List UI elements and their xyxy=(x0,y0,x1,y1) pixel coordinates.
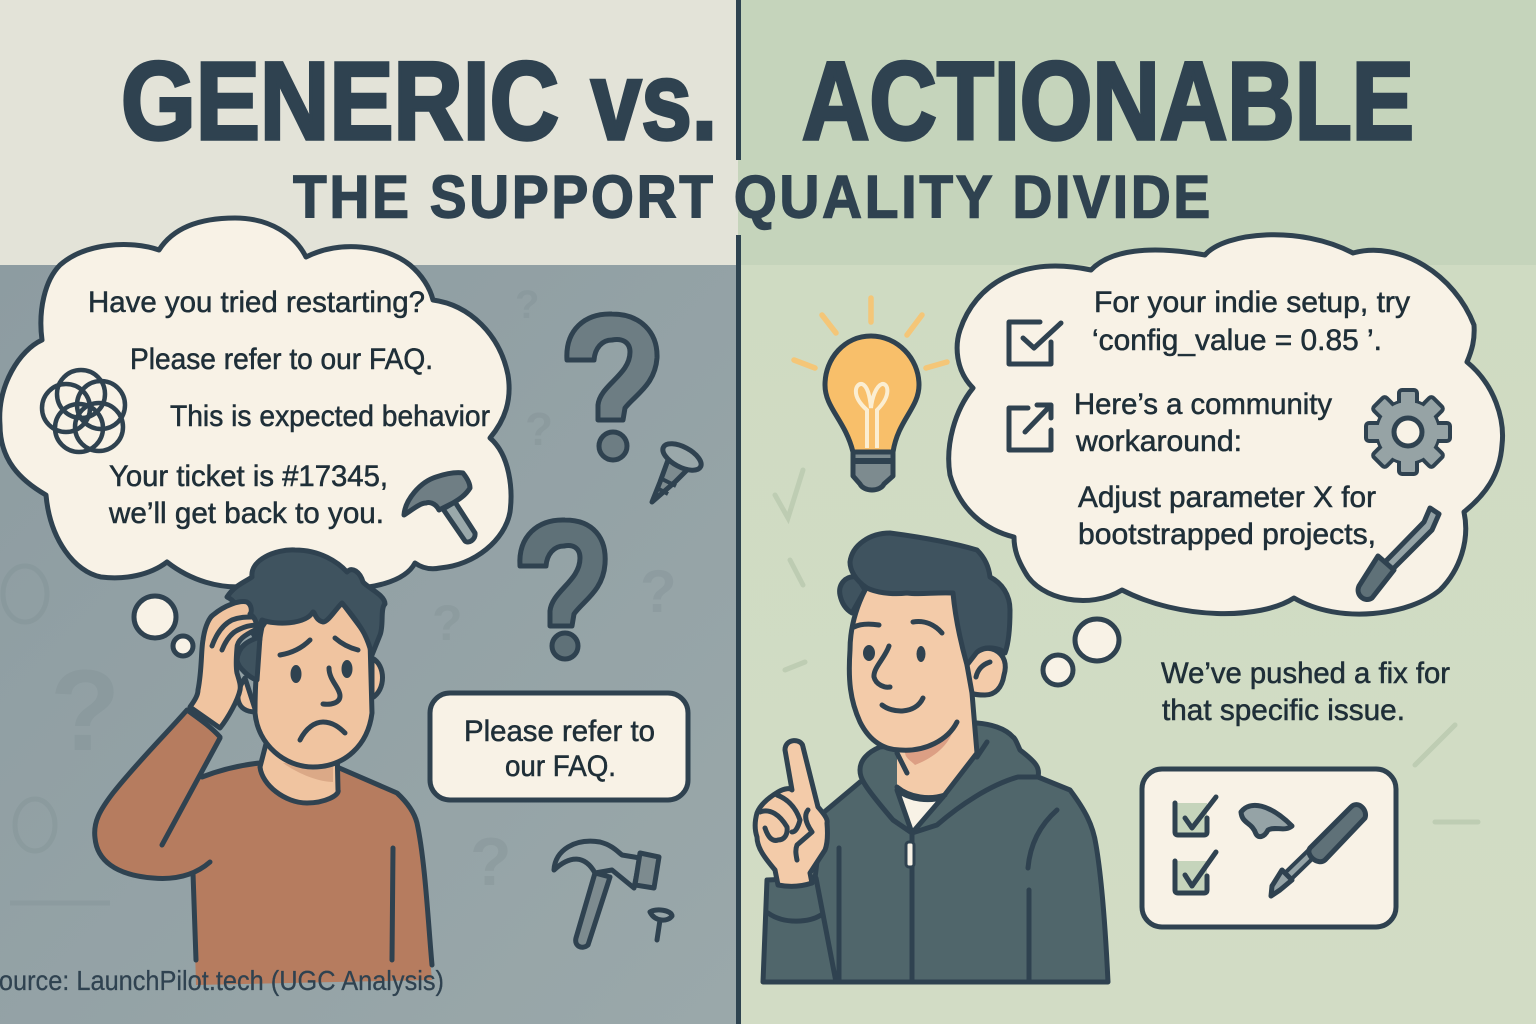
faint background marks: actionable side xyxy=(775,470,1478,822)
left thought text: Please refer to our FAQ. xyxy=(130,343,433,376)
nose xyxy=(323,668,340,704)
ear xyxy=(967,648,1005,695)
icon: tangled knot xyxy=(42,370,125,452)
hand xyxy=(190,602,256,728)
base xyxy=(853,452,893,490)
speech box: FAQ xyxy=(430,693,688,800)
faint background marks: generic side: ? xyxy=(515,283,539,327)
left thought text: Your ticket is #17345, xyxy=(109,460,388,493)
left thought text: we’ll get back to you. xyxy=(108,497,384,530)
small thought bubbles left xyxy=(134,596,193,656)
right thought text: bootstrapped projects, xyxy=(1078,518,1376,551)
glass xyxy=(825,336,919,452)
icon: large question mark 1 xyxy=(567,314,657,460)
finger lines xyxy=(212,617,258,650)
fix statement text xyxy=(1161,657,1450,727)
eyes xyxy=(290,660,352,683)
shirt xyxy=(897,790,943,833)
neck and collar lines xyxy=(768,693,1057,982)
right thought text: For your indie setup, try xyxy=(1094,286,1410,319)
faint background marks: generic side: ? xyxy=(640,558,677,625)
fix statement text: that specific issue. xyxy=(1162,694,1405,727)
icon: screw xyxy=(652,438,705,502)
right thought text: workaround: xyxy=(1075,425,1242,458)
small thought bubbles right xyxy=(1043,619,1119,685)
side hair xyxy=(840,577,865,613)
neck xyxy=(260,740,338,803)
faint background marks: generic side: ? xyxy=(50,647,120,775)
title: GENERIC xyxy=(121,40,559,163)
faint background marks: generic side: ? xyxy=(432,595,463,651)
icon: screwdriver in bubble xyxy=(1358,508,1439,600)
left thought cloud xyxy=(0,218,511,588)
icon: checkbox xyxy=(1009,322,1061,364)
right thought text: Here’s a community xyxy=(1074,388,1332,421)
panel: header right background xyxy=(738,0,1536,265)
side hair patch xyxy=(237,637,260,680)
screwdriver xyxy=(1271,805,1366,896)
neck shadow xyxy=(283,763,333,782)
icon: bubble hammer xyxy=(404,473,475,542)
icon: large question mark 2 xyxy=(520,520,605,659)
hoodie body xyxy=(763,767,1108,982)
panel: header left background xyxy=(0,0,738,265)
part blob xyxy=(1241,805,1292,837)
checklist box xyxy=(1142,769,1396,927)
zipper xyxy=(906,842,914,867)
left thought text: This is expected behavior xyxy=(170,400,490,433)
nose xyxy=(874,646,890,687)
smile xyxy=(882,698,923,711)
title: ACTIONABLE xyxy=(802,40,1414,163)
confused man xyxy=(95,550,432,985)
face xyxy=(255,600,372,767)
helpful man xyxy=(755,533,1108,982)
rays xyxy=(794,298,947,368)
frown xyxy=(300,722,345,740)
icon: external link xyxy=(1009,405,1051,450)
faint background marks: generic side: ? xyxy=(470,824,512,900)
panel: actionable side background xyxy=(738,265,1536,1024)
checkbox 2 xyxy=(1175,852,1216,893)
icon: hammer and nail xyxy=(554,841,672,947)
sweater with arm xyxy=(95,710,432,985)
left ear xyxy=(238,678,256,712)
hood xyxy=(860,723,1039,833)
ear right xyxy=(372,658,382,698)
neck shadow xyxy=(905,725,955,765)
ear detail xyxy=(976,662,990,677)
subtitle: THE SUPPORT QUALITY DIVIDE xyxy=(293,164,1210,231)
icon: light bulb xyxy=(794,298,947,490)
sweater outline xyxy=(95,710,432,965)
right thought text xyxy=(1074,286,1410,551)
center divider xyxy=(736,0,741,1024)
title xyxy=(121,40,1414,163)
speech box: FAQ: our FAQ. xyxy=(505,750,616,783)
hair xyxy=(850,533,1010,665)
right thought text: ‘config_value = 0.85 ’. xyxy=(1092,324,1382,357)
eyebrows xyxy=(280,638,358,655)
panel: generic side background xyxy=(0,265,738,1024)
eyes xyxy=(863,645,926,662)
fix statement text: We’ve pushed a fix for xyxy=(1161,657,1450,690)
icon: gear xyxy=(1366,390,1450,474)
left thought text: Have you tried restarting? xyxy=(88,286,425,319)
title: vs. xyxy=(591,40,717,163)
right thought text: Adjust parameter X for xyxy=(1078,481,1376,514)
speech box: FAQ: Please refer to xyxy=(464,715,655,748)
checkbox 1 xyxy=(1175,797,1216,835)
left thought text xyxy=(88,286,490,530)
faint background marks: generic side xyxy=(3,283,677,903)
chin xyxy=(849,590,957,750)
filament xyxy=(856,384,887,448)
hair xyxy=(227,550,385,655)
hand pointing xyxy=(755,741,827,886)
eyebrows xyxy=(854,622,942,633)
skin: face and neck xyxy=(849,590,977,798)
right thought cloud xyxy=(949,235,1503,614)
finger lines xyxy=(760,795,812,860)
faint background marks: generic side: ? xyxy=(525,403,553,455)
